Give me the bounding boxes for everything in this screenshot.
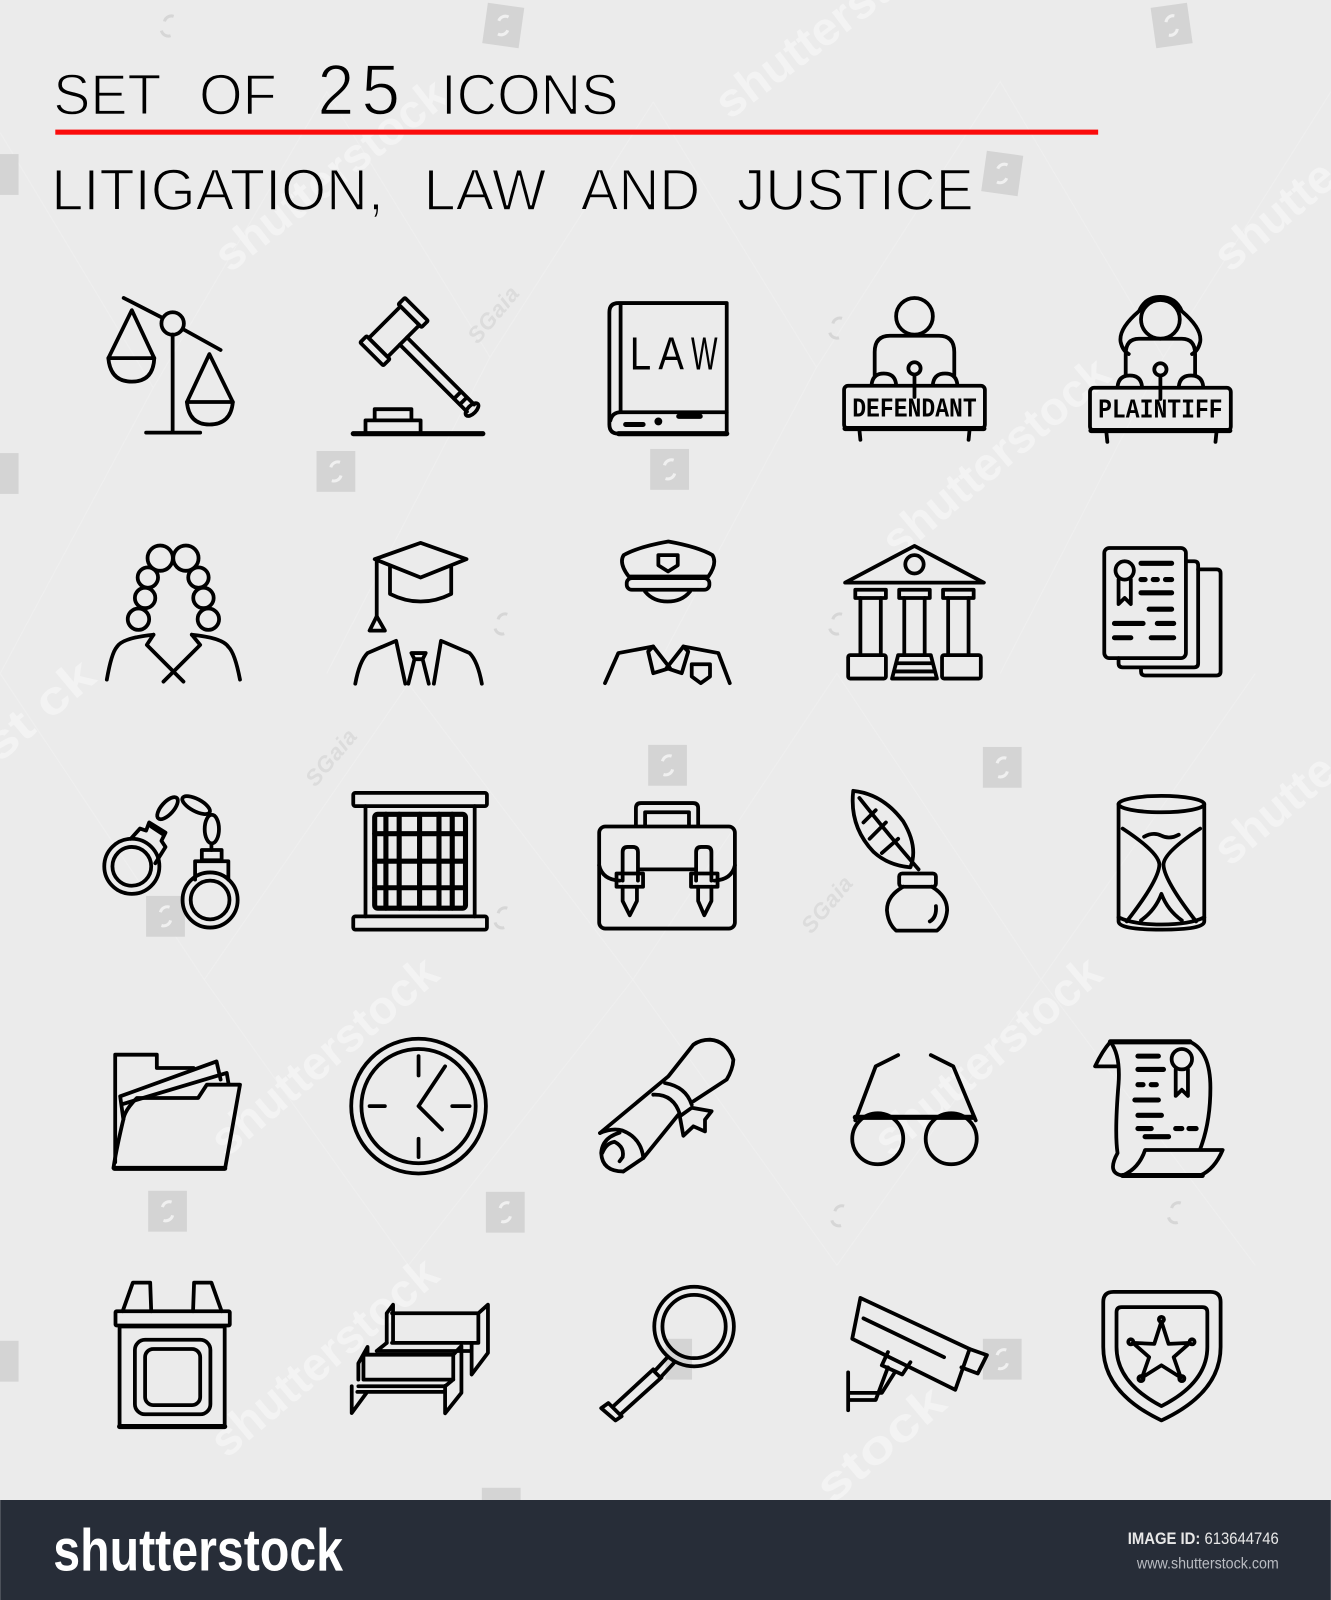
- icon: barred cell window: [353, 793, 487, 930]
- icon: scales of justice: [108, 298, 233, 433]
- image id: www.shutterstock.com: [1136, 1555, 1279, 1572]
- icon: quill and ink: [853, 791, 947, 931]
- icon: courthouse: [845, 546, 984, 679]
- heading: litigation, law and justice: [51, 158, 974, 223]
- icon: defendant at podium: [844, 298, 985, 440]
- watermarks: shutterstock: [200, 945, 449, 1166]
- icon: stacked documents: [1104, 548, 1221, 676]
- watermarks: shutterstock: [871, 346, 1120, 567]
- watermarks: SGaia: [796, 871, 858, 938]
- icon: courtroom benches: [352, 1305, 488, 1413]
- shutterstock logo: shutterstock: [53, 1516, 343, 1583]
- heading: set of 25 icons: 2: [318, 50, 354, 130]
- icon: security camera: [848, 1298, 987, 1410]
- watermarks: SGaia: [300, 724, 362, 791]
- heading: set of 25 icons: [53, 50, 619, 130]
- heading: litigation, law and justice: JUSTICE: [737, 158, 974, 223]
- footer bar: [0, 1500, 1331, 1600]
- icon: law book: L: [630, 327, 651, 379]
- icon: courtroom dock: [116, 1283, 230, 1427]
- icon: police officer: [605, 542, 730, 683]
- icon: hourglass: [1119, 796, 1204, 930]
- heading: set of 25 icons: OF: [199, 63, 277, 127]
- icon: reading glasses: [852, 1055, 977, 1164]
- icon: gavel: [353, 298, 497, 435]
- heading: set of 25 icons: 5: [361, 50, 400, 130]
- icon: judge with wig: [107, 546, 240, 682]
- watermarks: shutterstock: [200, 1246, 449, 1467]
- icon: handcuffs: [104, 793, 238, 928]
- red divider line: [55, 130, 1098, 135]
- icon: plaintiff at podium: [1090, 297, 1231, 442]
- watermarks: shutterstock: [204, 67, 458, 281]
- icon: defendant at podium: DEFENDANT: [852, 394, 977, 424]
- image id: IMAGE ID: 613644746: [1128, 1530, 1279, 1548]
- icon: folder with papers: [113, 1055, 240, 1168]
- icon: law book: A: [658, 327, 684, 379]
- heading: litigation, law and justice: LAW: [424, 158, 546, 223]
- icon: wall clock: [351, 1039, 486, 1173]
- icon: briefcase: [599, 803, 735, 929]
- heading: set of 25 icons: SET: [53, 63, 161, 127]
- heading: set of 25 icons: ICONS: [441, 63, 619, 127]
- heading: litigation, law and justice: AND: [581, 158, 700, 223]
- icon: document scroll with seal: [1095, 1042, 1223, 1176]
- watermarks: stock: [805, 1374, 956, 1513]
- image id: [1128, 1530, 1279, 1572]
- watermarks: shutterstock: [863, 945, 1112, 1166]
- icon: magnifying glass: [601, 1287, 734, 1420]
- icon: law book: W: [691, 327, 718, 379]
- icon: law book: [609, 303, 727, 434]
- watermarks: SGaia: [462, 281, 524, 348]
- heading: litigation, law and justice: LITIGATION,: [51, 158, 384, 223]
- icon: sheriff shield: [1103, 1292, 1221, 1420]
- icon: diploma scroll: [600, 1040, 733, 1171]
- icon: plaintiff at podium: PLAINTIFF: [1098, 395, 1223, 425]
- icon: lawyer in graduation cap: [355, 543, 482, 684]
